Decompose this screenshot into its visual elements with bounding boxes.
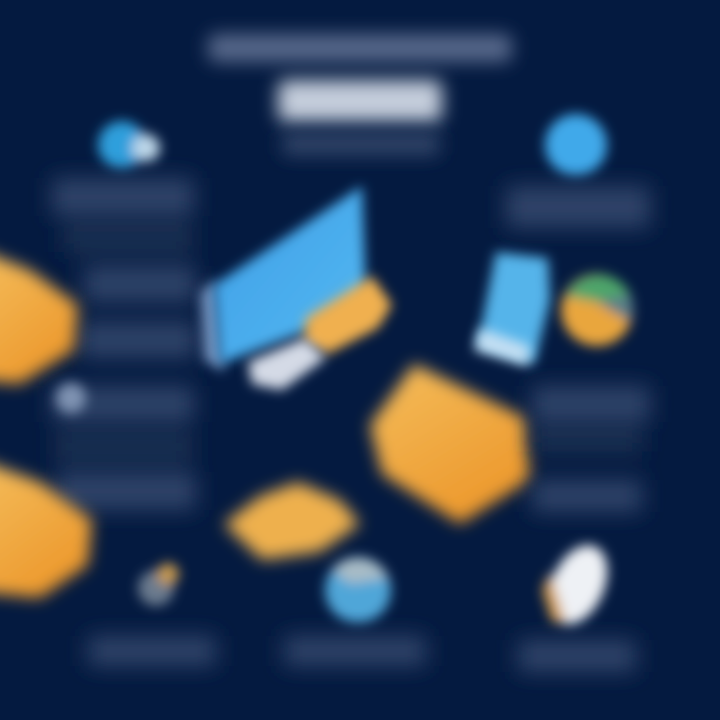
icon: top left globe [98, 121, 160, 169]
orange box upper left [0, 250, 78, 384]
monitor edge [200, 280, 224, 372]
title line 1 [208, 34, 512, 62]
bottom label left [88, 636, 216, 666]
icon: bottom right [537, 536, 619, 634]
icon: top right globe [545, 114, 607, 176]
icon: bottom left [138, 563, 179, 606]
monitor screen [214, 186, 366, 364]
bottom label centre [284, 636, 426, 666]
phone base [474, 328, 530, 366]
orange box lower left [0, 460, 92, 598]
icon: pie chart [561, 274, 633, 346]
icon: small bullet [56, 383, 86, 413]
icon: bottom centre globe [325, 557, 391, 623]
bottom label right [518, 640, 636, 672]
title line 2 [278, 80, 442, 122]
monitor illustration [200, 186, 392, 390]
text column right lower [532, 386, 650, 512]
keyboard [248, 338, 326, 390]
subtitle [282, 132, 440, 156]
text column right upper [506, 186, 650, 228]
text column left [52, 178, 196, 510]
large orange box [370, 364, 530, 524]
icon: phone [478, 252, 550, 364]
title block [208, 34, 512, 156]
orange package on monitor [304, 276, 392, 354]
orange flat package [224, 482, 360, 560]
